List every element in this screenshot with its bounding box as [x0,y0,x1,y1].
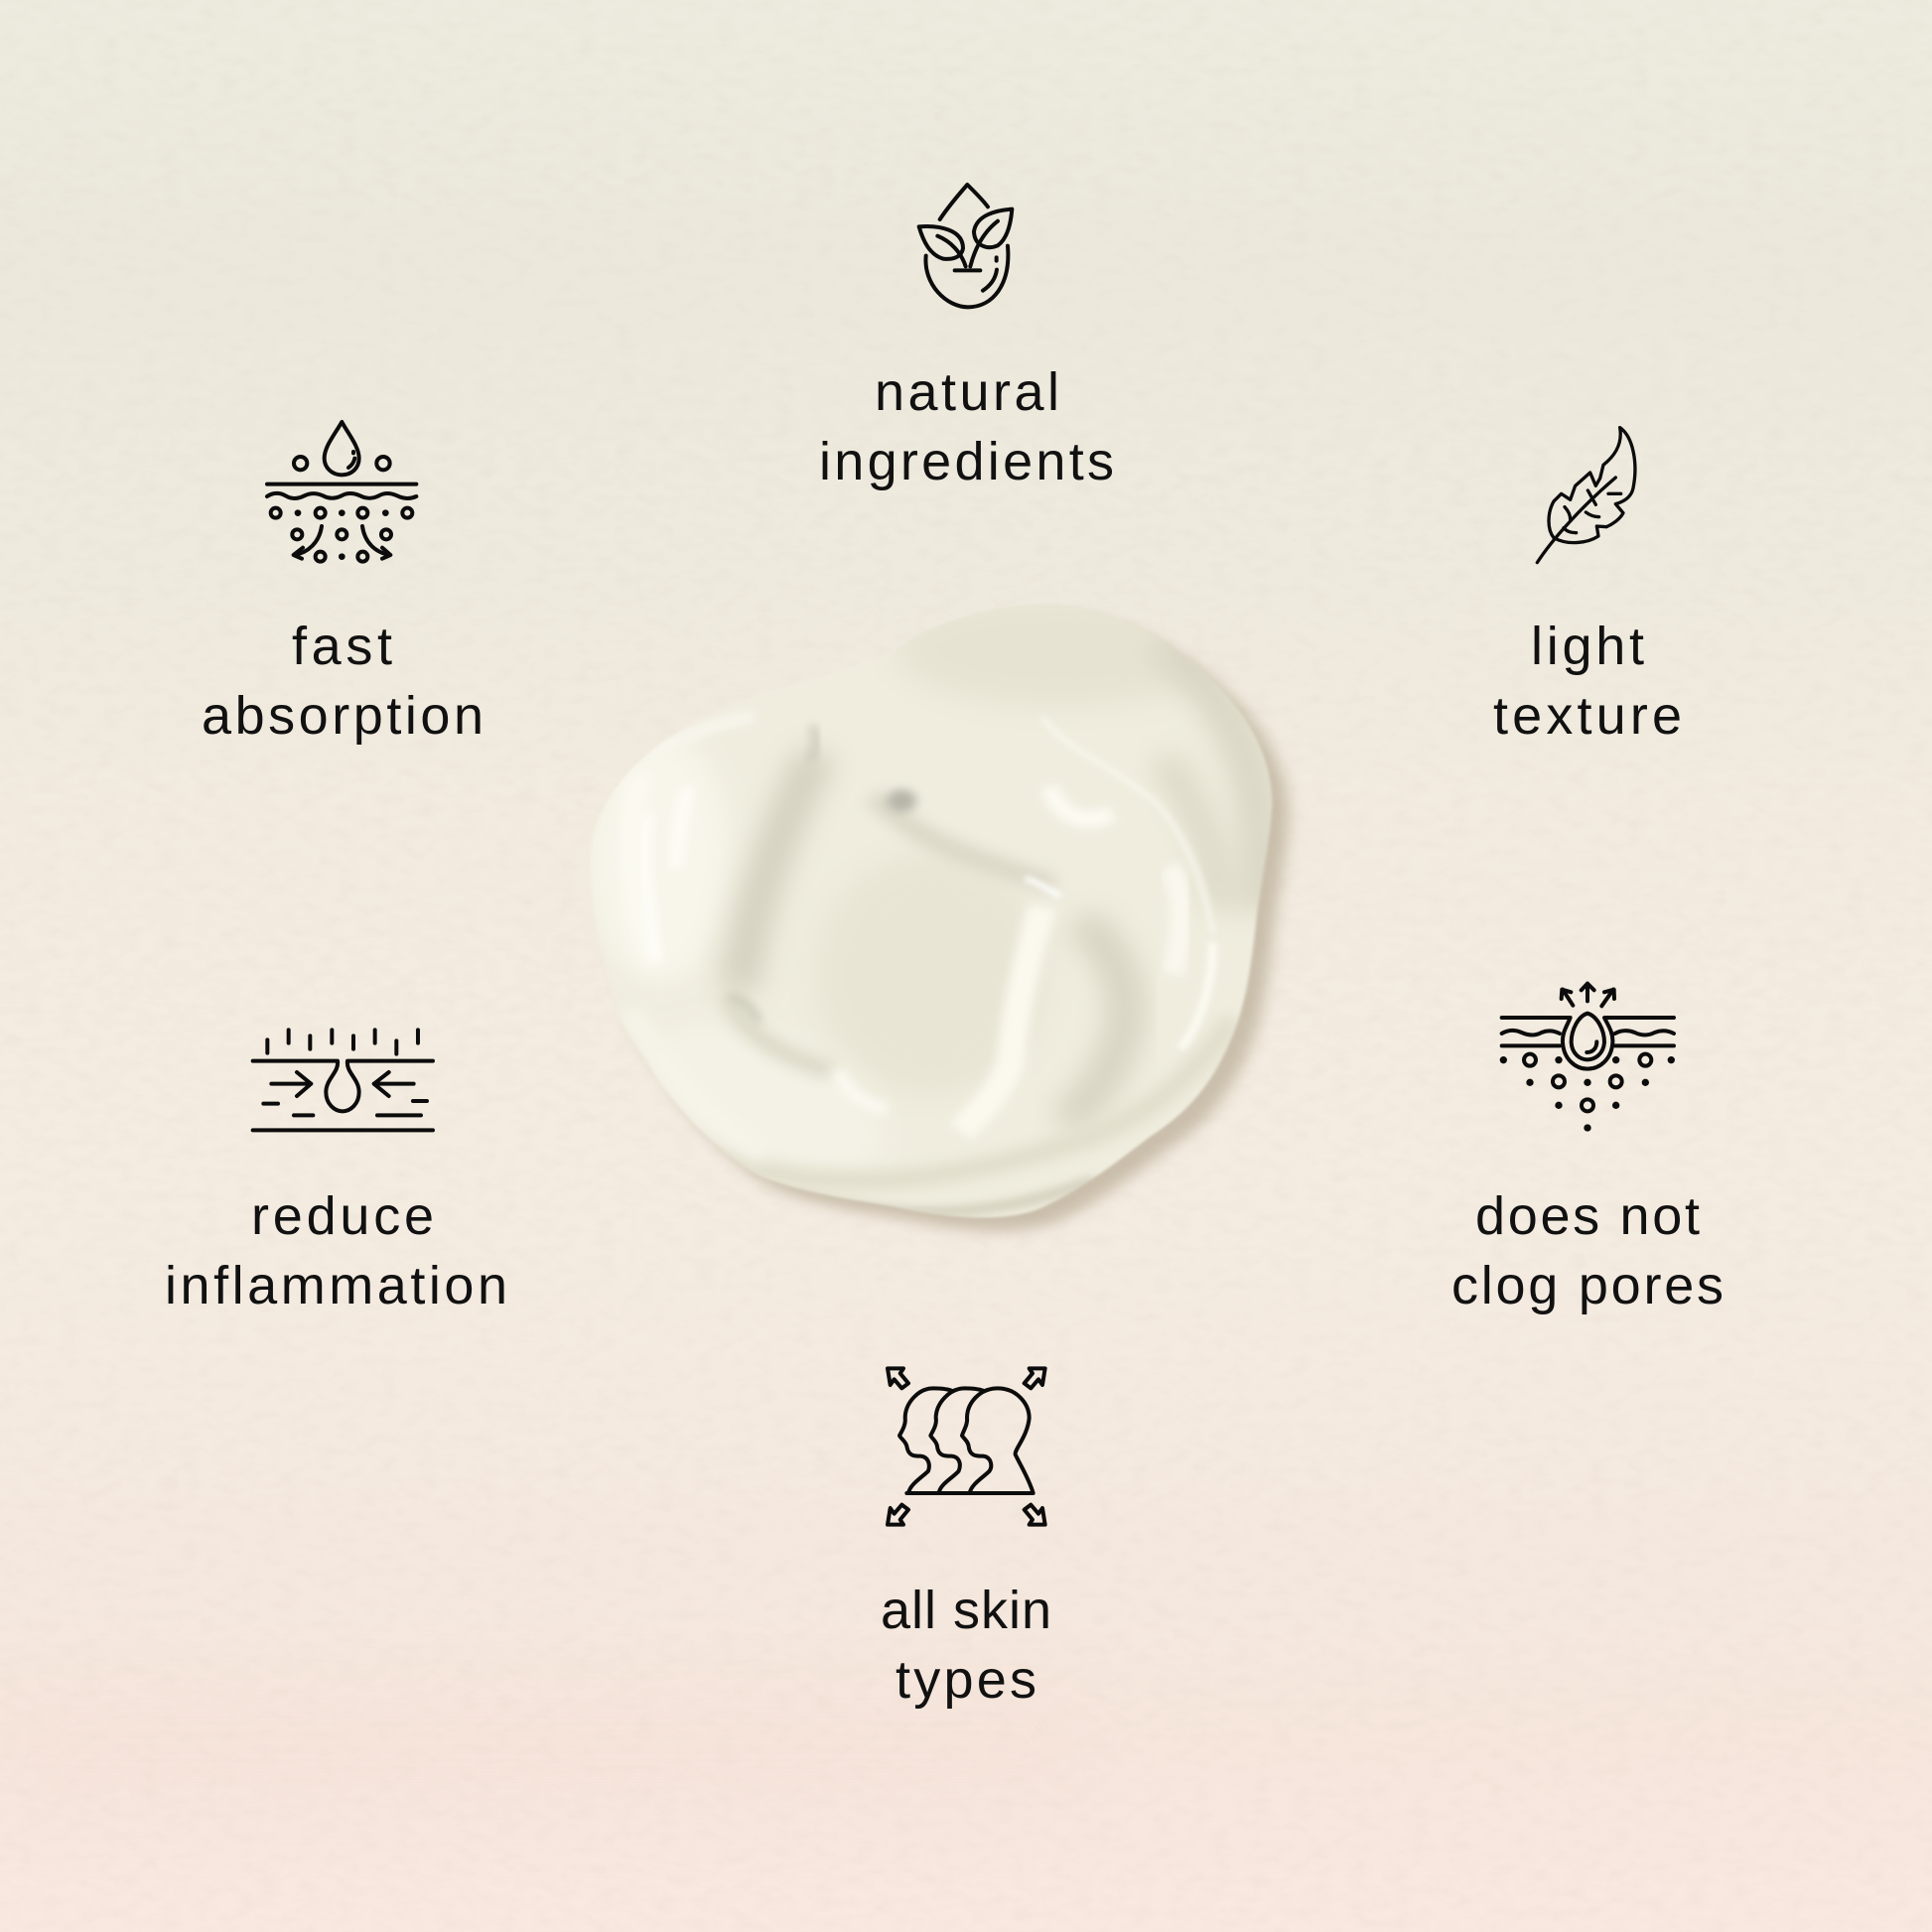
panel: natural ingredients [819,185,1114,491]
icon: leaf [1537,428,1635,563]
label: light texture [1493,617,1682,746]
label: does not clog pores: does not [1475,1186,1700,1246]
label: reduce inflammation: reduce [251,1186,434,1246]
label: does not clog pores [1451,1186,1724,1315]
label: natural ingredients: ingredients [819,432,1114,491]
label: fast absorption: absorption [202,686,483,746]
label: fast absorption [202,617,483,746]
panel: does not clog pores [1451,984,1724,1315]
label: all skin types [881,1581,1051,1710]
label: light texture: light [1531,617,1644,676]
panel: all skin types [881,1368,1051,1710]
label: natural ingredients [819,362,1114,491]
label: all skin types: all skin [881,1581,1051,1640]
label: natural ingredients: natural [875,362,1059,422]
cream swatch [592,606,1297,1238]
label: all skin types: types [896,1650,1036,1710]
icon: three head profiles with arrows [888,1368,1045,1525]
label: reduce inflammation: inflammation [165,1256,507,1315]
icon: plant in a drop [919,185,1012,307]
label: light texture: texture [1493,686,1682,746]
icon: drop absorbing through skin [267,422,416,562]
label: does not clog pores: clog pores [1451,1256,1724,1315]
label: fast absorption: fast [292,617,392,676]
panel: light texture [1493,428,1682,746]
icon: unclogged pore [1500,984,1675,1132]
label: reduce inflammation [165,1186,507,1315]
panel: fast absorption [202,422,483,746]
icon: pore tightening [253,1030,433,1130]
panel: reduce inflammation [165,1030,507,1315]
